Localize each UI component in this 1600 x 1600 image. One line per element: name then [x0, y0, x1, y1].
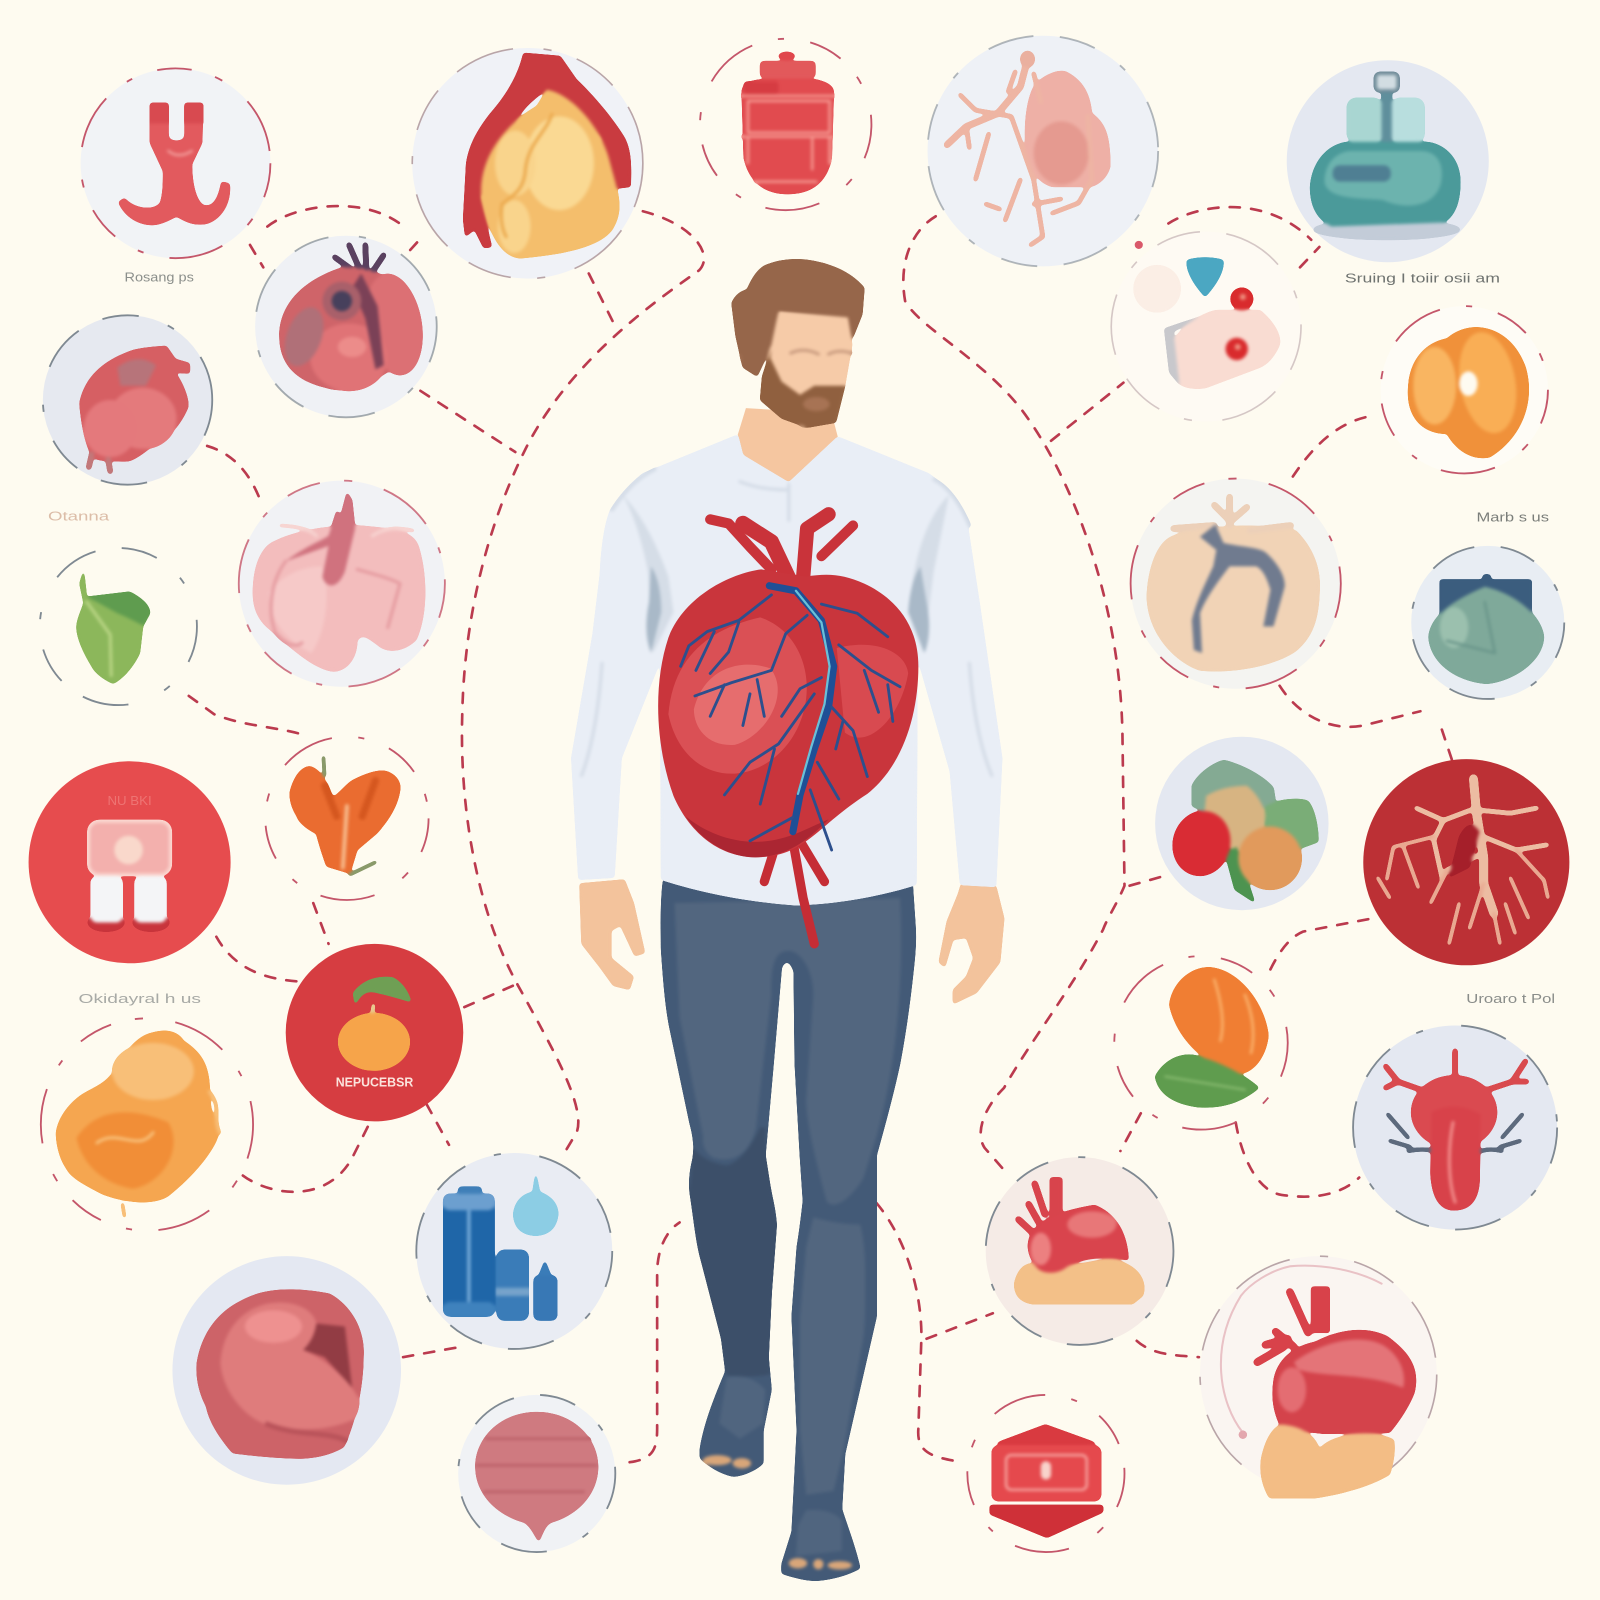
label: faint heading inside red circle: NU BKI: [107, 793, 152, 808]
panel: green organ: [1411, 546, 1564, 699]
connectors: dashed lines: [189, 206, 1452, 1462]
panel: yellow organ with red vessels: [412, 48, 643, 279]
icon: fatty organ: [463, 53, 631, 258]
panel: orange tangled organ: [41, 1018, 253, 1231]
panel: large red organ: [172, 1256, 401, 1485]
figure: left hand: [580, 880, 645, 990]
label: left lower caption: Okidayral h us: [79, 991, 202, 1006]
figure: shirt: [571, 435, 1002, 905]
icon: teal inhaler device: [1310, 73, 1460, 240]
panel: bladder bowl: [458, 1395, 615, 1552]
thin inner arc: [1221, 1266, 1382, 1433]
panel: red jar: [700, 39, 871, 210]
heart body: [658, 569, 918, 857]
panel: orange lobes: [265, 737, 429, 900]
icon: green leaf: [77, 569, 150, 684]
panel: orange ring organ: [1381, 306, 1548, 473]
icon: orange with leaf: [338, 977, 411, 1070]
figure: trousers: [661, 880, 916, 1581]
label: right lower caption: Uroaro t Pol: [1466, 991, 1555, 1006]
icon: green organ with dark cap: [1429, 574, 1544, 684]
icon: pink organ with vessels: [947, 51, 1110, 245]
icon: pink organ: [253, 492, 425, 671]
panel: red vessel tree: [1363, 759, 1569, 965]
panel: pale pink vascular organ: [928, 36, 1158, 266]
icon: vessel tree: [1378, 779, 1548, 944]
panel: heart on orange pad: [986, 1157, 1173, 1345]
icon: heart and lobes: [1239, 1287, 1416, 1498]
panel: red box: [967, 1395, 1124, 1552]
icon: aorta with tongue: [1386, 1051, 1527, 1210]
panel: pink lung organ: [239, 481, 445, 687]
figure: neck: [738, 408, 838, 485]
icon: orange blob: [56, 1031, 219, 1216]
panel: teal device: [1287, 60, 1489, 262]
panel: red tooth circle: [29, 761, 231, 963]
icon: blue bottles and drop: [443, 1171, 558, 1320]
icon: red organ: [197, 1290, 363, 1458]
panel: green leaf: [40, 548, 197, 705]
icon: orange twin lobes: [290, 757, 400, 874]
icon: aortic branches: [710, 514, 853, 944]
icon: red forked airway: [118, 103, 230, 225]
figure: head and hair: [732, 259, 864, 428]
panel: pale organ with gem and dots: [1111, 232, 1301, 421]
icon: heart: [80, 346, 190, 471]
panel: fruit plate: [1155, 737, 1329, 910]
panel: throat branch organ: [81, 68, 270, 258]
icon: heart: [277, 245, 430, 391]
label: top right caption: Sruing I toiir osii am: [1345, 271, 1500, 286]
central figure: man: [571, 259, 1004, 1581]
icon: beige organ with grey vessel: [1147, 497, 1320, 671]
icon: toes: [703, 1455, 852, 1569]
icon: tooth: [88, 821, 170, 932]
icon: pink round bladder: [476, 1412, 598, 1542]
panel: red orange circle: [286, 944, 463, 1121]
panel: orange fruit and leaf: [1114, 956, 1288, 1130]
icon: heart on pad: [1014, 1178, 1144, 1304]
icon: orange fruit with leaf: [1155, 967, 1268, 1107]
blue vessels: [681, 586, 900, 850]
icon: orange kidney ring: [1408, 328, 1529, 458]
label: top left caption: Rosang ps: [124, 270, 194, 285]
icon: red hexagon case: [990, 1424, 1103, 1538]
icon: red jar: [742, 52, 834, 194]
panel: pink heart: [43, 315, 212, 485]
label: left middle caption: Otanna: [48, 508, 110, 523]
panel: large heart on orange lobes: [1200, 1256, 1437, 1498]
figure: right hand: [939, 884, 1004, 1004]
label: right middle caption: Marb s us: [1477, 509, 1549, 524]
panel: beige organ with grey fork: [1131, 479, 1341, 689]
icon: fruit and greens: [1166, 760, 1318, 903]
icon: pale body with markers: [1134, 258, 1280, 389]
panel: blue bottles: [416, 1153, 612, 1349]
panel: heart with purple vessels: [255, 236, 437, 417]
label: caption inside red circle: NEPUCEBSR: [336, 1075, 413, 1090]
figure: heart anatomy: [658, 514, 918, 944]
panel: red tongue vessel: [1353, 1026, 1557, 1230]
